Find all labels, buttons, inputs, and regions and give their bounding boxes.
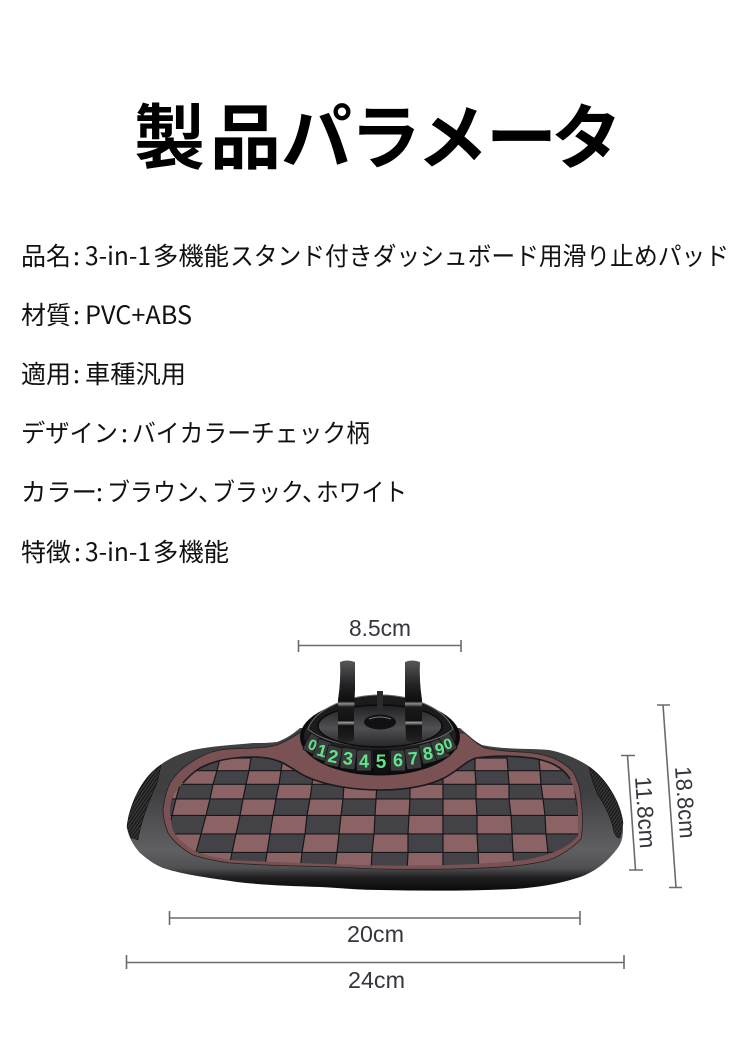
number digits: 1: [315, 741, 329, 761]
spec: colours: ブラウン: [107, 473, 199, 509]
spec: colours: 、: [198, 473, 223, 509]
dimension: 11.8cm: [621, 756, 661, 870]
spec: features: :: [74, 533, 81, 569]
dimension: 20cm: 20cm: [347, 921, 404, 947]
number digits: 6: [393, 750, 403, 770]
spec: applicable vehicles: :: [73, 355, 80, 391]
number digits: 9: [433, 739, 447, 760]
spec: colours: ブラック: [212, 473, 304, 509]
number digits: 2: [326, 746, 340, 767]
spec: colours: ホワイト: [316, 473, 407, 509]
dimension: 11.8cm: 11.8cm: [630, 776, 661, 849]
number digits: 5: [376, 752, 387, 773]
pad body: [127, 728, 623, 891]
spec: colours: [21, 473, 407, 509]
dimension: 8.5cm: [298, 615, 461, 652]
number tiles: [303, 732, 457, 772]
spec list: [21, 237, 729, 569]
dimension: 24cm: 24cm: [348, 967, 405, 993]
spec: design: :: [121, 414, 128, 450]
rear pin: [377, 691, 383, 710]
spec: product name: スタンド付きダッシュボード用滑り止めパッド: [230, 237, 729, 273]
number digits: 0: [441, 735, 455, 754]
spec: colours: 、: [302, 473, 327, 509]
title: 製品パラメータ: [134, 100, 622, 179]
rotating disc: [318, 705, 442, 747]
spec: applicable vehicles: 適用: [21, 355, 71, 391]
number digits: [305, 735, 455, 773]
number digits: 3: [342, 748, 354, 769]
spec: product name: :: [73, 237, 80, 273]
spec: colours: カラー: [21, 473, 97, 509]
spec: features: 多機能: [153, 533, 229, 569]
spec: features: 3-in-1: [85, 533, 151, 569]
dial base ring: [300, 698, 460, 776]
product photo: dashboard anti-slip pad with stand: [121, 660, 658, 891]
dimension: 24cm: [126, 955, 624, 993]
dimension: 18.8cm: [657, 705, 701, 888]
right phone clamp arm: [405, 660, 422, 742]
spec: features: 特徴: [21, 533, 71, 569]
brown frame: [163, 733, 582, 869]
brown squares: [170, 757, 578, 866]
spec: product name: 品名: [21, 237, 71, 273]
spec: material: :: [73, 296, 80, 332]
number band: [304, 704, 456, 768]
spec: applicable vehicles: [21, 355, 186, 391]
left side grip: [127, 765, 161, 840]
checkerboard mat: [170, 756, 578, 866]
spec: product name: 3-in-1: [85, 237, 151, 273]
spec: colours: :: [96, 473, 103, 509]
top rim: [308, 695, 453, 747]
number digits: 8: [421, 743, 434, 764]
left phone clamp arm: [338, 660, 355, 742]
spec: design: バイカラーチェック柄: [132, 414, 370, 450]
number digits: 4: [359, 752, 369, 772]
dimension: 8.5cm: 8.5cm: [349, 615, 411, 641]
dimension: 20cm: [170, 911, 580, 947]
parking number plate: [303, 704, 457, 773]
spec: design: [21, 414, 370, 450]
spec: product name: [21, 237, 729, 273]
spec: material: PVC+ABS: [85, 296, 192, 332]
spec: material: [21, 296, 192, 332]
number digits: 0: [305, 736, 319, 755]
spec: features: [21, 533, 229, 569]
centre knob: [364, 714, 396, 730]
spec: applicable vehicles: 車種汎用: [85, 355, 186, 391]
spec: material: 材質: [21, 296, 71, 332]
neck shadow under frame: [183, 756, 570, 790]
number digits: 7: [407, 748, 419, 769]
dimension: 18.8cm: 18.8cm: [670, 766, 701, 839]
spec: design: デザイン: [21, 414, 118, 450]
spec: product name: 多機能: [153, 237, 229, 273]
right side grip: [589, 767, 623, 838]
